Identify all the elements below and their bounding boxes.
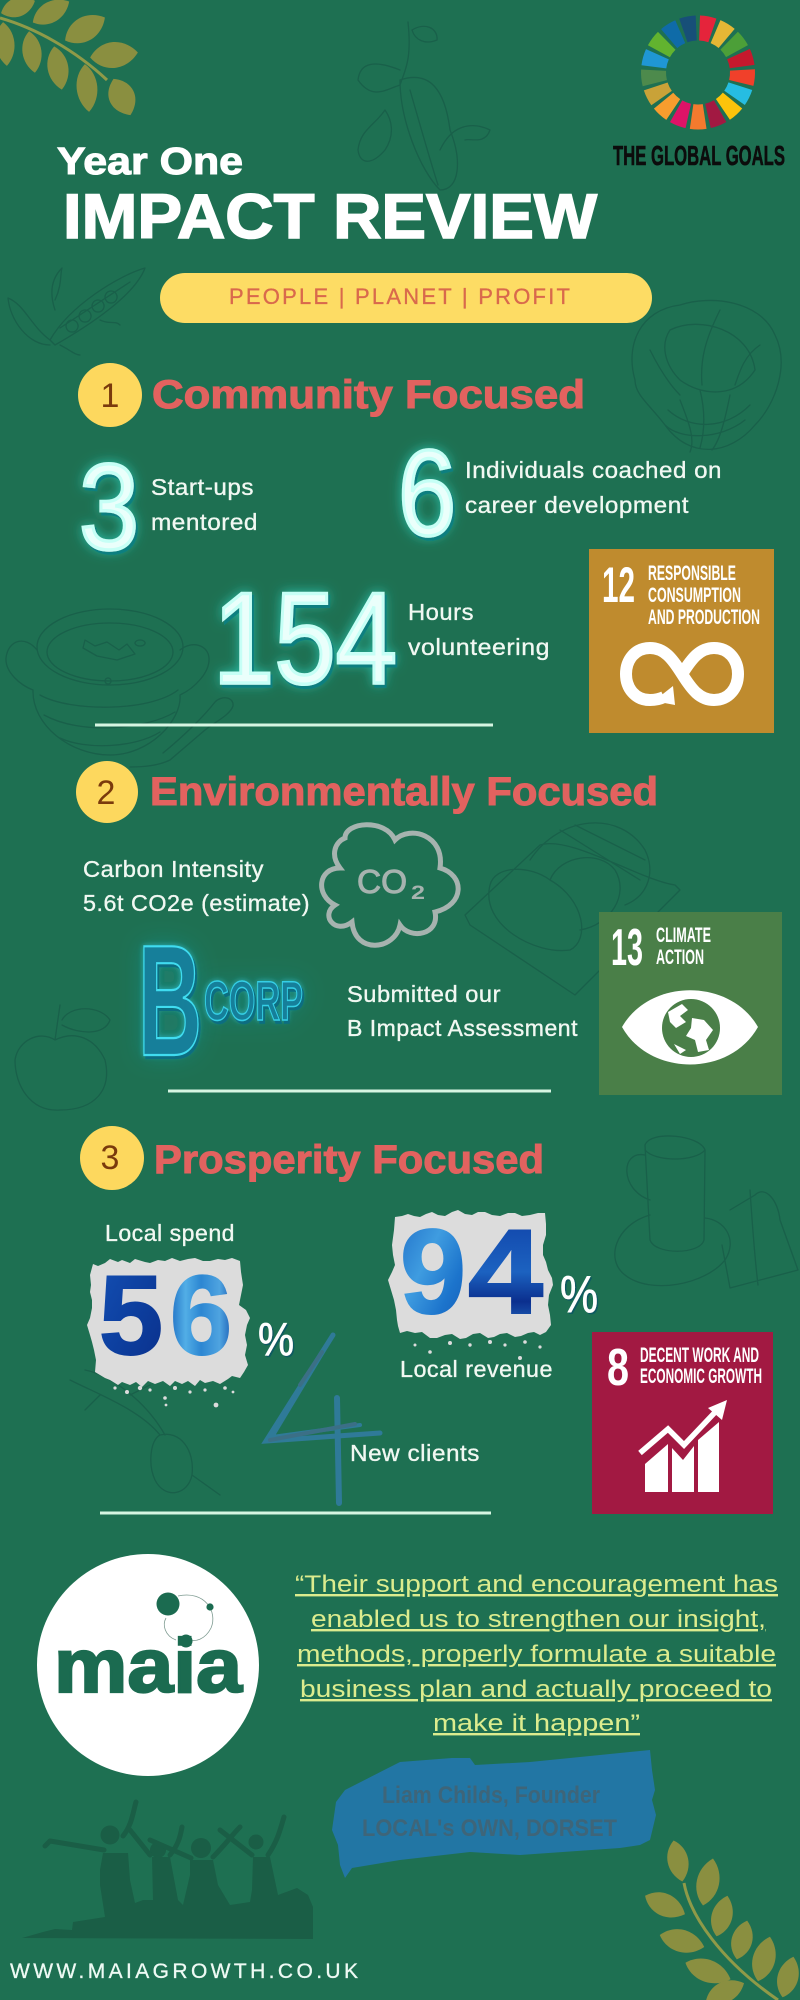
sketch: beetroot — [70, 1370, 220, 1495]
panel: community focused — [78, 363, 774, 733]
icon: growth chart — [640, 1400, 727, 1492]
heading: Environmentally Focused: Environmentally Focused — [150, 770, 658, 814]
stat: 3 start-ups mentored: Start-ups — [151, 474, 254, 500]
stat: 3 start-ups mentored: 3 — [79, 439, 139, 575]
attribution on blue brush stroke — [332, 1750, 656, 1878]
stat: local revenue 94%: Local revenue — [400, 1356, 553, 1382]
title line: Impact Review: IMPACT REVIEW — [63, 182, 598, 252]
SDG 12 tile — [589, 549, 774, 733]
logo: B Corp neon: CORP — [204, 969, 303, 1032]
stat: local revenue 94%: % — [560, 1266, 598, 1324]
SDG 8 tile: 8 — [607, 1339, 629, 1397]
stat: carbon intensity — [83, 856, 310, 916]
attribution on blue brush stroke: LOCAL's OWN, DORSET — [362, 1815, 617, 1842]
SDG 13 tile: 13 — [611, 919, 643, 977]
stat: 6 individuals coached — [398, 425, 722, 561]
icon: CO2 cloud: CO — [357, 863, 407, 900]
logo: B Corp neon — [138, 913, 303, 1089]
website url: WWW.MAIAGROWTH.CO.UK — [10, 1960, 358, 1983]
icon: infinity arrow — [626, 648, 738, 705]
stat: B impact assessment — [347, 981, 578, 1041]
logo: maia — [37, 1554, 259, 1776]
silhouette: celebrating people — [22, 1802, 313, 1939]
stat: 154 hours volunteering: volunteering — [408, 634, 550, 660]
icon: SDG colour wheel — [635, 10, 761, 135]
badge 3 — [80, 1126, 144, 1190]
testimonial quote: business plan and actually proceed to — [300, 1676, 772, 1703]
stat: local revenue 94%: 9 — [400, 1205, 466, 1339]
testimonial quote: make it happen” — [433, 1710, 640, 1737]
SDG 12 tile: 12 — [602, 557, 635, 613]
stat: 4 new clients — [266, 1335, 480, 1503]
SDG 13 tile — [599, 912, 782, 1095]
SDG 8 tile — [592, 1332, 773, 1514]
icon: CO2 cloud: 2 — [411, 883, 425, 904]
badge 1 — [78, 363, 142, 427]
decoration: leaf branch top left — [0, 0, 142, 121]
stat: B impact assessment: Submitted our — [347, 981, 501, 1007]
stat: local spend 56%: Local spend — [105, 1220, 235, 1246]
stat: local spend 56%: 6 — [170, 1253, 232, 1378]
stat: local revenue 94%: 4 — [468, 1205, 543, 1339]
stat: B impact assessment: B Impact Assessment — [347, 1015, 578, 1041]
sketch: pea pods top — [358, 22, 490, 190]
sketch: soup pot — [6, 609, 233, 767]
heading: Community Focused: Community Focused — [152, 373, 585, 417]
stat: local revenue 94% — [388, 1205, 598, 1382]
decoration: leaf branch bottom right — [640, 1838, 800, 2000]
badge 2 — [76, 761, 138, 823]
stat: 6 individuals coached: career development — [465, 492, 689, 518]
badge 1: 1 — [101, 377, 119, 415]
panel: environmentally focused — [76, 761, 782, 1095]
sketch: cabbage — [632, 300, 781, 452]
SDG 13 tile: CLIMATE — [656, 924, 711, 947]
sketch: avocado on board — [465, 823, 680, 995]
stat: 154 hours volunteering: 154 — [213, 565, 397, 711]
stat: 6 individuals coached: Individuals coached on — [465, 457, 722, 483]
badge 3: 3 — [101, 1139, 119, 1177]
sketch: cup and saucer — [615, 1136, 798, 1288]
testimonial quote: “Their support and encouragement has — [295, 1571, 778, 1598]
sketch: apple — [15, 1005, 110, 1110]
icon: eye with globe — [622, 990, 758, 1064]
stat: local spend 56% — [87, 1220, 294, 1407]
stat: 4 new clients: New clients — [350, 1440, 480, 1466]
logo: B Corp neon: B — [138, 913, 202, 1089]
stat: 3 start-ups mentored: mentored — [151, 509, 258, 535]
stat: 154 hours volunteering: Hours — [408, 599, 474, 625]
panel: prosperity focused — [80, 1126, 773, 1514]
icon: CO2 cloud — [322, 825, 458, 945]
testimonial quote: methods, properly formulate a suitable — [297, 1641, 776, 1668]
stat: 6 individuals coached: 6 — [398, 425, 456, 561]
stat: carbon intensity: 5.6t CO2e (estimate) — [83, 890, 310, 916]
title line: Year One: Year One — [57, 141, 243, 183]
Global Goals logo — [613, 10, 785, 171]
stat: 3 start-ups mentored — [79, 439, 258, 575]
stat: carbon intensity: Carbon Intensity — [83, 856, 264, 882]
tagline pill: PEOPLE | PLANET | PROFIT — [229, 284, 570, 309]
attribution on blue brush stroke: Liam Childs, Founder — [382, 1782, 600, 1809]
SDG 13 tile: ACTION — [656, 946, 704, 969]
logo: maia: maia — [54, 1624, 243, 1709]
tagline pill — [160, 273, 652, 323]
badge 2: 2 — [97, 774, 115, 812]
heading: Prosperity Focused: Prosperity Focused — [154, 1138, 544, 1182]
title — [57, 141, 598, 252]
SDG 12 tile: RESPONSIBLE — [648, 562, 736, 585]
stat: 154 hours volunteering — [213, 565, 550, 711]
stat: local spend 56%: 5 — [99, 1253, 163, 1378]
testimonial quote — [295, 1571, 778, 1737]
testimonial quote: enabled us to strengthen our insight, — [311, 1606, 766, 1633]
stat: local spend 56%: % — [258, 1313, 294, 1365]
sketch: pea pod left — [8, 268, 145, 355]
